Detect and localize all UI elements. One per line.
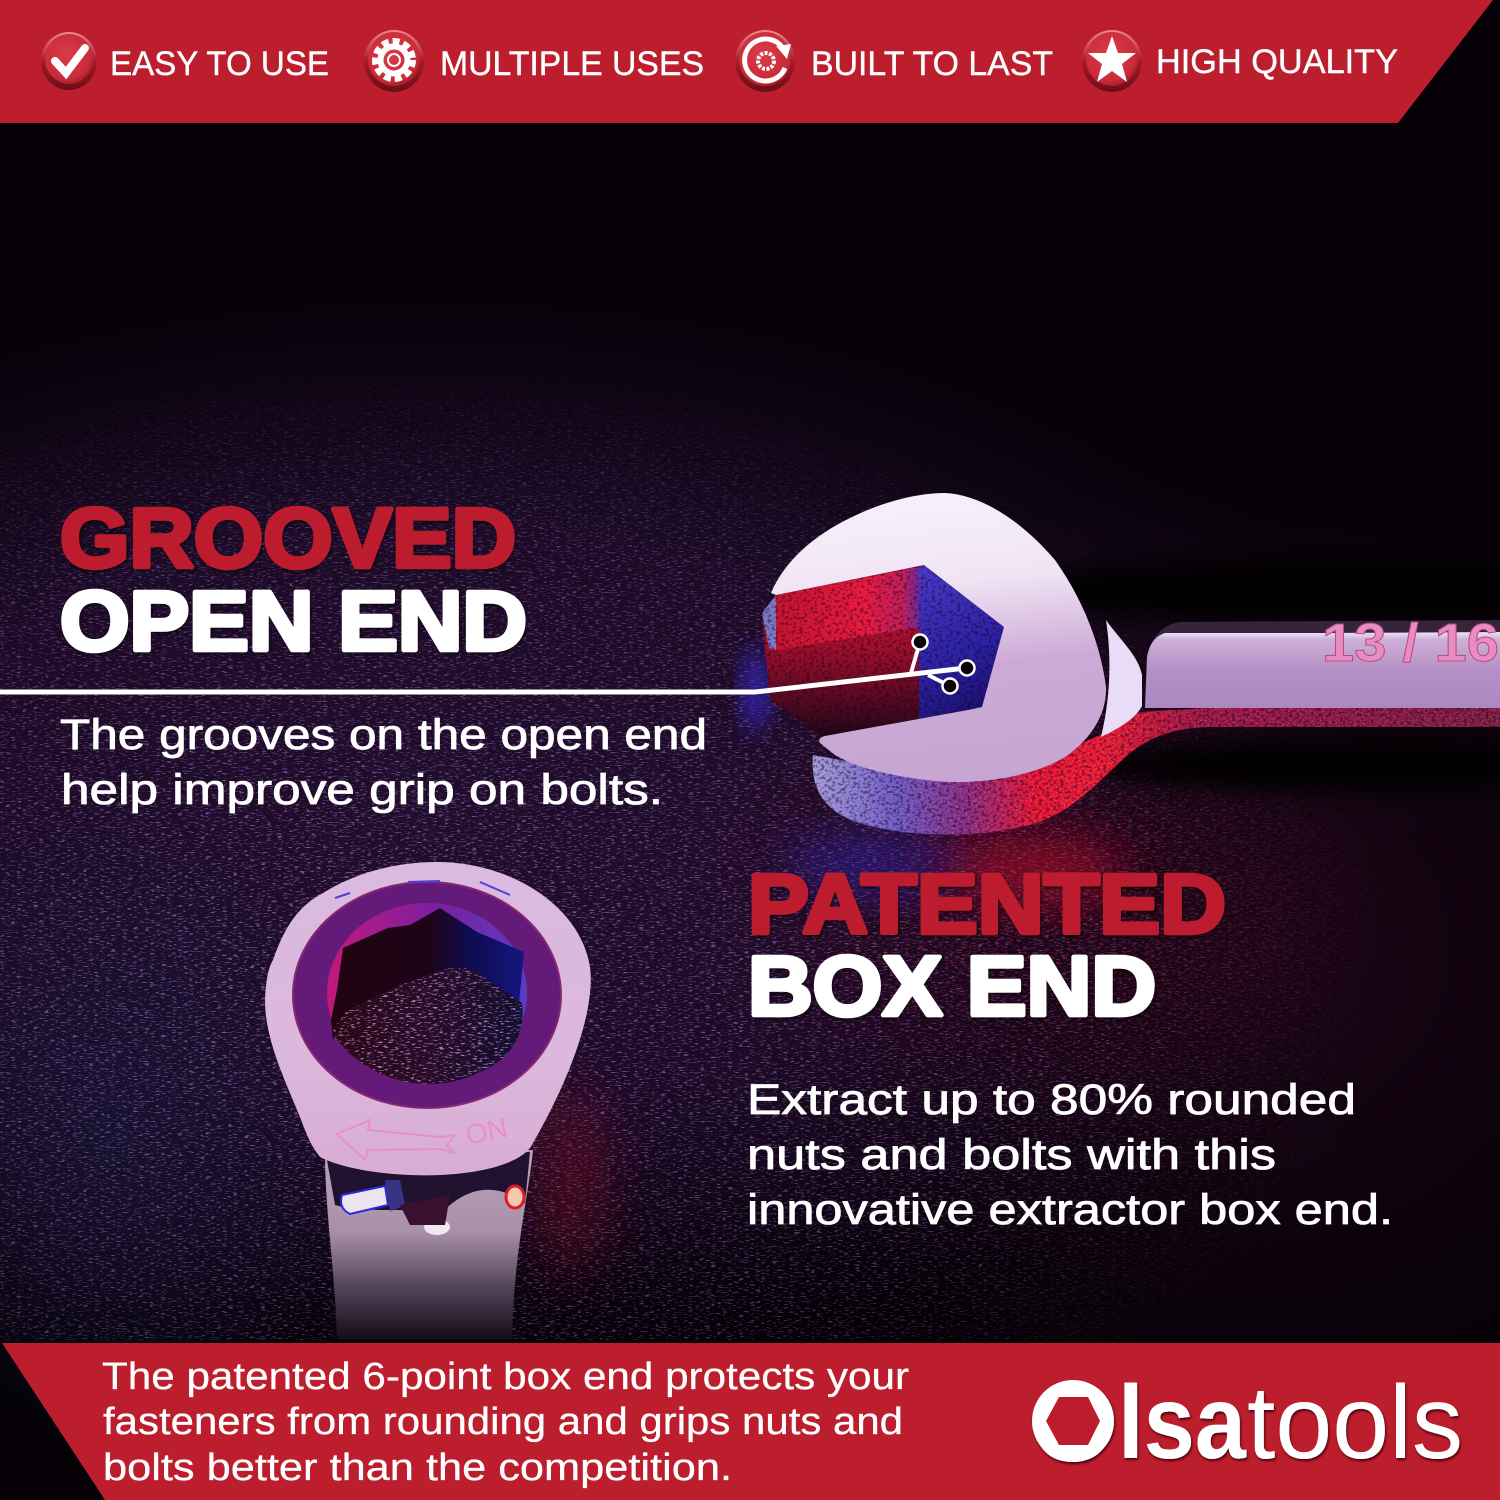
headline: grooved open end [60, 491, 527, 668]
feature: easy to use [41, 32, 329, 90]
logo: Olsatools: tools [1247, 1365, 1463, 1481]
headline: patented box end: PATENTED [748, 857, 1226, 951]
headline: patented box end: BOX END [748, 939, 1156, 1033]
banner text: fasteners from rounding and grips nuts and [103, 1401, 903, 1443]
wrench neck highlight [1101, 620, 1142, 737]
callout line with pointer dots [0, 634, 974, 694]
feature: multiple uses: MULTIPLE USES [440, 45, 704, 83]
headline: grooved open end: GROOVED [60, 491, 516, 585]
feature: multiple uses [364, 30, 704, 92]
wrench: grooved open end [744, 493, 1500, 902]
ring head [265, 862, 591, 1175]
feature: high quality: HIGH QUALITY [1156, 43, 1398, 81]
top banner [0, 0, 1493, 123]
direction arrow and ON stamp: ON [463, 1112, 510, 1151]
wrench: patented box end [265, 862, 610, 1340]
text: patented box end description: nuts and bolts with this [747, 1131, 1276, 1179]
banner text [102, 1356, 909, 1489]
text: grooved open end description: help improve grip on bolts. [61, 766, 663, 814]
jaw cavity with grooves [762, 565, 1004, 737]
text: patented box end description: innovative extractor box end. [747, 1186, 1393, 1234]
feature: high quality [1082, 30, 1398, 92]
headline: patented box end [748, 857, 1226, 1033]
banner text: The patented 6-point box end protects your [102, 1356, 909, 1398]
red floor glow [530, 1085, 610, 1275]
text: grooved open end description [60, 711, 707, 814]
background: dark textured surface [0, 288, 1500, 1434]
size stamp 13/16: 13 / 16 [1322, 613, 1499, 673]
feature: easy to use: EASY TO USE [110, 45, 329, 83]
feature: built to last: BUILT TO LAST [811, 45, 1053, 83]
wrench handle [1145, 620, 1500, 708]
logo: Olsatools: O [1030, 1360, 1116, 1485]
logo: Olsatools: lsa [1118, 1365, 1247, 1481]
headline: grooved open end: OPEN END [60, 574, 527, 668]
banner text: bolts better than the competition. [103, 1447, 732, 1489]
handle [325, 1150, 533, 1340]
bottom banner [2, 1343, 1500, 1500]
logo: Olsatools [1030, 1360, 1463, 1485]
direction arrow and ON stamp [337, 1112, 510, 1160]
inner bevel ring [293, 882, 561, 1108]
handle reflections [327, 1152, 530, 1235]
wrench body side edge [812, 708, 1500, 834]
feature: built to last [735, 30, 1053, 92]
text: grooved open end description: The grooves on the open end [60, 711, 707, 759]
wrench head face [771, 493, 1106, 782]
text: patented box end description: Extract up to 80% rounded [747, 1076, 1356, 1124]
hex opening [325, 903, 530, 1090]
text: patented box end description [747, 1076, 1393, 1234]
floor light reflections [744, 648, 1125, 902]
